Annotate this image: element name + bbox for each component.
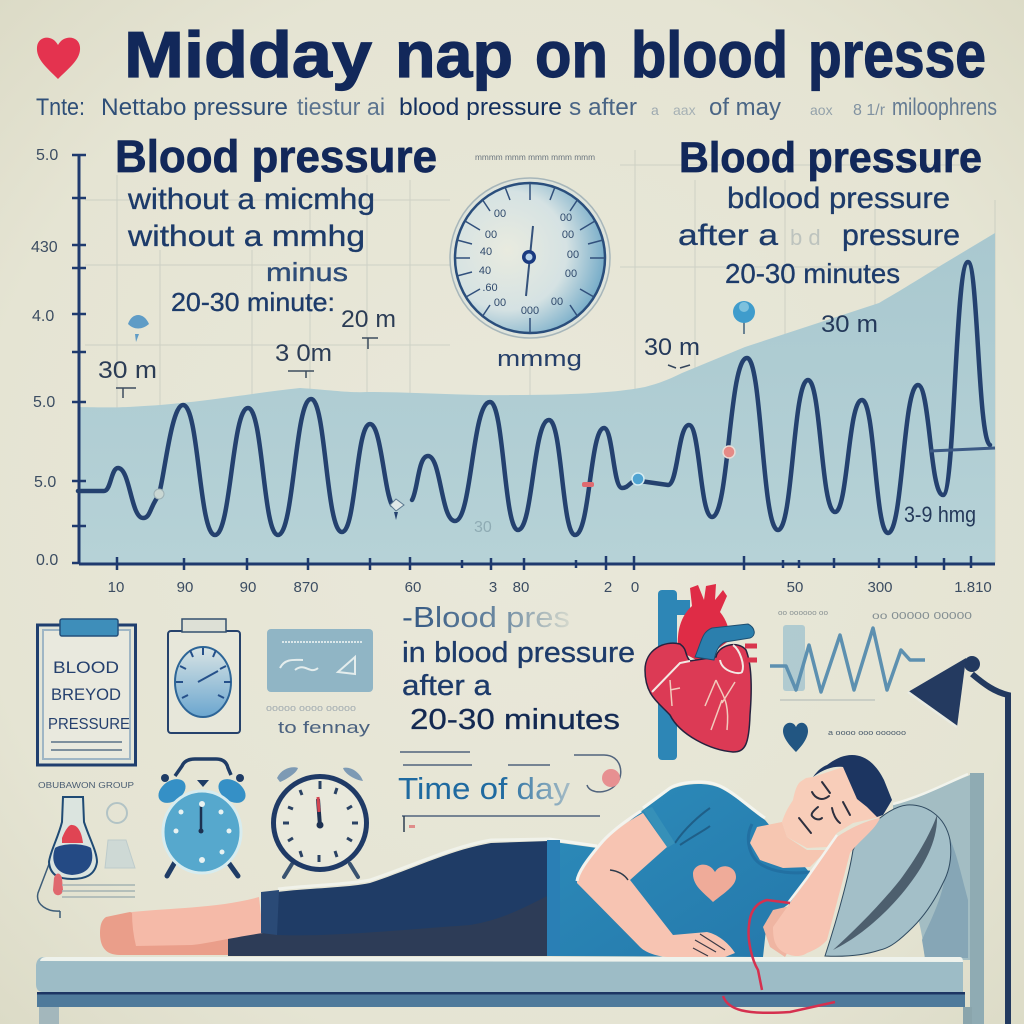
- gauge numbers: 00: [567, 249, 579, 261]
- subtitle: Tnte:: [36, 94, 85, 121]
- right chart annotations: 30 m: [821, 311, 878, 338]
- gauge needle: [526, 226, 533, 296]
- center text block: after a: [402, 670, 492, 702]
- x axis: [79, 556, 995, 570]
- chart area fill: [79, 233, 995, 563]
- headboard: [893, 775, 970, 960]
- chart: blood pressure over time: [31, 147, 995, 596]
- gauge ticks: [455, 183, 605, 333]
- faint chart number: 30: [474, 519, 492, 536]
- mattress: [36, 957, 963, 992]
- icon: small navy heart: [783, 723, 808, 752]
- upper leg: [277, 841, 549, 935]
- subtitle: of may: [709, 94, 781, 121]
- red cable: [723, 900, 835, 1013]
- heart on shirt: [693, 865, 736, 902]
- shirt body: [547, 784, 810, 957]
- shirt band: [547, 840, 560, 956]
- center text block: -Blood pres: [402, 602, 570, 634]
- gauge numbers: 00: [551, 296, 563, 308]
- icon: blue alarm clock: [154, 759, 250, 876]
- left chart annotations: [98, 305, 396, 398]
- card caption: [266, 703, 371, 737]
- icon: framed gauge card: [168, 619, 240, 733]
- icon: blue info card: [267, 629, 373, 692]
- left chart annotations: 3 0m: [275, 340, 332, 367]
- x axis labels: 1.810: [954, 579, 992, 596]
- x axis labels: 300: [867, 579, 893, 596]
- right text block: 20-30 minutes: [725, 258, 900, 289]
- x axis labels: 3: [489, 579, 497, 596]
- right text block: pressure: [842, 219, 960, 252]
- near arm: [577, 813, 735, 957]
- bed base: [37, 994, 965, 1007]
- gauge numbers: 40: [479, 265, 491, 277]
- supporting forearm and hand: [773, 818, 880, 956]
- gauge numbers: 00: [562, 229, 574, 241]
- left text block: [127, 183, 375, 317]
- title: on: [535, 18, 608, 91]
- small wave chart: [770, 610, 973, 700]
- chart grid: [85, 150, 995, 563]
- left chart annotations: 20 m: [341, 306, 396, 333]
- panel: center gauge: [450, 153, 610, 371]
- right text block: b d: [790, 225, 821, 250]
- x axis labels: 10: [108, 579, 124, 596]
- title: blood: [631, 18, 788, 91]
- sleeve band: [643, 807, 675, 848]
- x axis labels: 90: [240, 579, 256, 596]
- icon: flask: [38, 797, 135, 918]
- left text block: without a mmhg: [127, 220, 365, 253]
- lower dark leg: [228, 895, 549, 956]
- gauge numbers: 40: [480, 246, 492, 258]
- y axis labels: 5.0: [33, 394, 55, 411]
- left text block: minus: [266, 257, 348, 287]
- face: [782, 767, 880, 848]
- baseline stub right: [930, 448, 995, 451]
- x axis labels: 80: [513, 579, 529, 596]
- flask caption: OBUBAWON GROUP: [38, 781, 134, 790]
- calf skin: [132, 897, 263, 946]
- right heading: Blood pressure: [679, 134, 982, 182]
- y axis labels: [31, 147, 58, 569]
- right chart annotations: 30 m: [644, 334, 700, 361]
- shirt crease: [675, 808, 710, 845]
- upper arm stub: [763, 906, 800, 957]
- left chart annotations: 30 m: [98, 357, 157, 384]
- right chart annotations: 3-9 hmg: [904, 502, 976, 527]
- title: Midday: [124, 18, 372, 91]
- icon: lamp: [908, 656, 1008, 1024]
- clipboard text: [48, 658, 130, 733]
- subtitle: aox: [810, 102, 833, 118]
- center text block: [402, 602, 635, 736]
- gauge caption: mmmm mmm mmm mmm mmm: [475, 153, 595, 162]
- small wave chart: oo 00000 00000: [872, 611, 973, 622]
- icon: title heart: [37, 38, 80, 79]
- subtitle: tiestur ai: [297, 94, 385, 121]
- subtitle: [36, 94, 997, 121]
- right chart annotations: [644, 311, 976, 527]
- x axis labels: 60: [405, 579, 421, 596]
- gauge numbers: .60: [482, 282, 498, 294]
- icon: clipboard: [38, 619, 136, 765]
- closed eyes and mouth: [799, 782, 850, 833]
- gauge unit: mmmg: [497, 346, 582, 371]
- right text block: after a: [678, 219, 778, 252]
- y axis labels: 5.0: [34, 474, 56, 491]
- gauge numbers: 00: [560, 212, 572, 224]
- x axis labels: [108, 579, 992, 596]
- y axis labels: 4.0: [32, 308, 54, 325]
- gauge numbers: 00: [565, 268, 577, 280]
- left text block: without a micmhg: [127, 183, 375, 216]
- bed legs: [39, 1007, 59, 1024]
- blood pressure wave line: [78, 262, 990, 535]
- x axis labels: 90: [177, 579, 193, 596]
- gauge numbers: 000: [521, 305, 539, 317]
- subtitle: Nettabo pressure: [101, 94, 288, 121]
- subtitle: s after: [569, 94, 637, 121]
- sleeping person: [100, 755, 892, 1013]
- clipboard text: BREYOD: [51, 685, 121, 704]
- gauge dial: [450, 178, 610, 338]
- vessels: [745, 646, 757, 660]
- title: [124, 18, 986, 91]
- small wave chart: oo oooooo oo: [778, 610, 828, 617]
- time of day label: [398, 752, 621, 832]
- pulmonary artery: [695, 624, 754, 660]
- right text block: bdlood pressure: [727, 182, 950, 215]
- hair: [813, 755, 892, 817]
- icon: dark wall clock: [274, 767, 366, 877]
- subtitle: 8 1/r: [853, 102, 886, 119]
- bed frame: [36, 773, 984, 1024]
- vena cava pipe: [658, 590, 677, 760]
- x axis labels: 50: [787, 579, 803, 596]
- subtitle: miloophrens: [892, 94, 997, 121]
- x axis labels: 0: [631, 579, 639, 596]
- subtitle: aax: [673, 102, 696, 118]
- icon: anatomical heart: [645, 584, 757, 760]
- clipboard text: PRESSURE: [48, 716, 130, 733]
- card caption: ooooo oooo ooooo: [266, 703, 356, 713]
- clipboard text: BLOOD: [53, 658, 119, 677]
- subtitle: blood pressure: [399, 94, 562, 121]
- right text block: [678, 182, 960, 289]
- gauge numbers: 00: [494, 297, 506, 309]
- y axis labels: 430: [31, 239, 58, 256]
- x axis labels: 870: [293, 579, 319, 596]
- time of day label: Time of day: [398, 771, 571, 806]
- title: nap: [395, 18, 513, 91]
- pants cuff: [261, 890, 279, 935]
- left text block: 20-30 minute:: [171, 287, 335, 317]
- gauge numbers: 00: [485, 229, 497, 241]
- y axis labels: 5.0: [36, 147, 58, 164]
- center text block: in blood pressure: [402, 637, 635, 669]
- gauge numbers: [479, 208, 579, 317]
- card caption: to fennay: [278, 718, 371, 737]
- gauge numbers: 00: [494, 208, 506, 220]
- y axis: [72, 155, 86, 564]
- y axis labels: 0.0: [36, 552, 58, 569]
- foot and calf lower: [100, 912, 228, 955]
- pillow: [825, 805, 951, 956]
- second bottle: [105, 803, 135, 868]
- icon: blue pin: [733, 301, 755, 334]
- chart markers: [154, 446, 735, 520]
- aorta: [678, 584, 730, 662]
- title: presse: [808, 18, 986, 91]
- subtitle: a: [651, 102, 659, 118]
- heart body: [645, 643, 751, 752]
- small heart caption: a oooo ooo oooooo: [828, 730, 906, 737]
- left heading: Blood pressure: [115, 131, 437, 182]
- center text block: 20-30 minutes: [410, 704, 620, 736]
- x axis labels: 2: [604, 579, 612, 596]
- neck: [750, 822, 827, 868]
